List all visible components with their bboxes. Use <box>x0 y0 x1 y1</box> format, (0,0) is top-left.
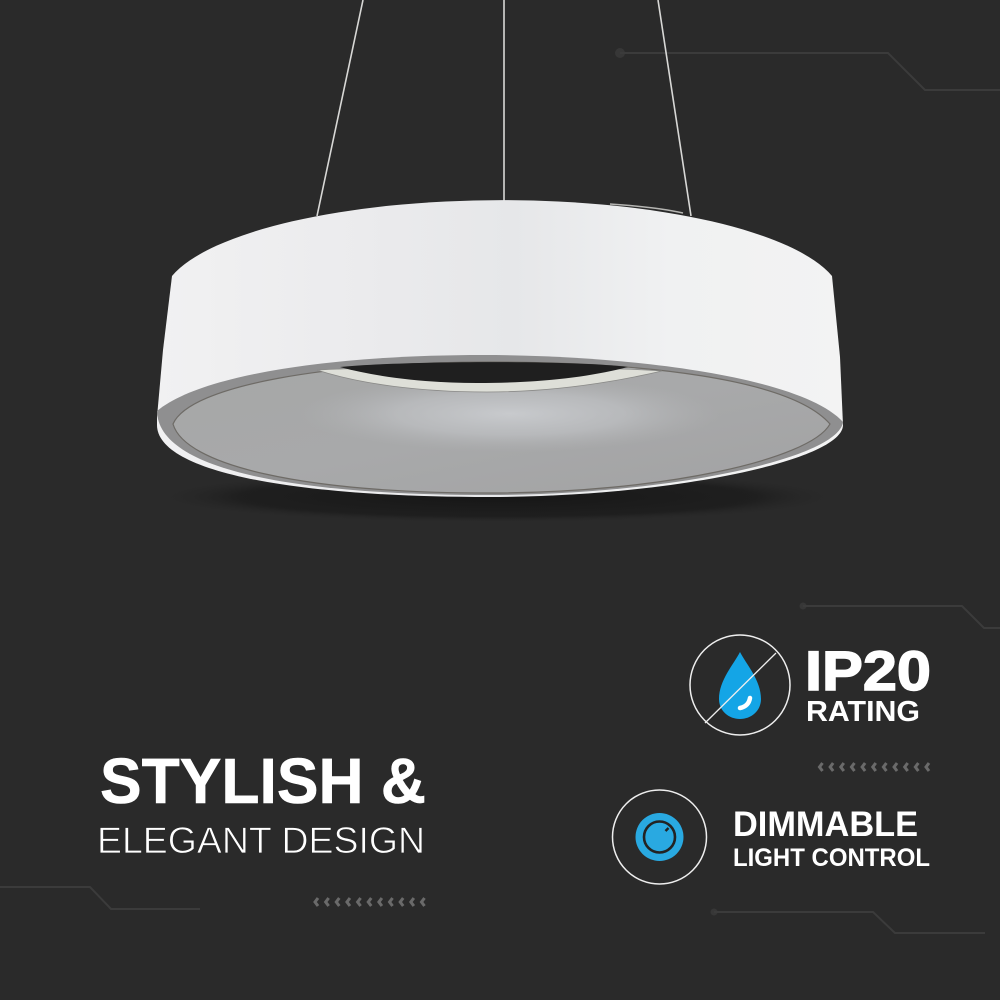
light control text: LIGHT CONTROL <box>733 844 930 872</box>
dimmable label <box>733 805 930 872</box>
heading line 1: STYLISH & <box>100 745 426 817</box>
chevron row: left <box>315 898 424 906</box>
circuit line: middle right <box>800 602 1000 628</box>
icon: no water drop <box>690 635 790 735</box>
dimmable text: DIMMABLE <box>733 805 918 844</box>
central opening <box>340 362 628 383</box>
top far rim sliver <box>610 204 683 213</box>
lamp interior <box>173 362 830 493</box>
lamp outer body <box>157 200 843 497</box>
circuit line: top right <box>615 48 1000 90</box>
interior glow <box>300 376 720 452</box>
lamp lower shade <box>157 355 843 495</box>
heading <box>97 745 426 861</box>
heading line 2: ELEGANT DESIGN <box>97 820 425 861</box>
lamp shadow <box>152 471 842 523</box>
suspension wires <box>317 0 691 216</box>
IP20 text: IP20 <box>805 639 931 702</box>
icon: dimmable control <box>612 790 706 884</box>
IP20 rating label <box>805 639 931 728</box>
rating text: RATING <box>806 696 920 728</box>
light diffuser band <box>317 368 662 392</box>
pendant lamp <box>152 200 843 523</box>
chevron row: right <box>820 763 929 771</box>
circuit line: bottom right <box>710 908 985 933</box>
circuit line: bottom left <box>0 887 200 909</box>
